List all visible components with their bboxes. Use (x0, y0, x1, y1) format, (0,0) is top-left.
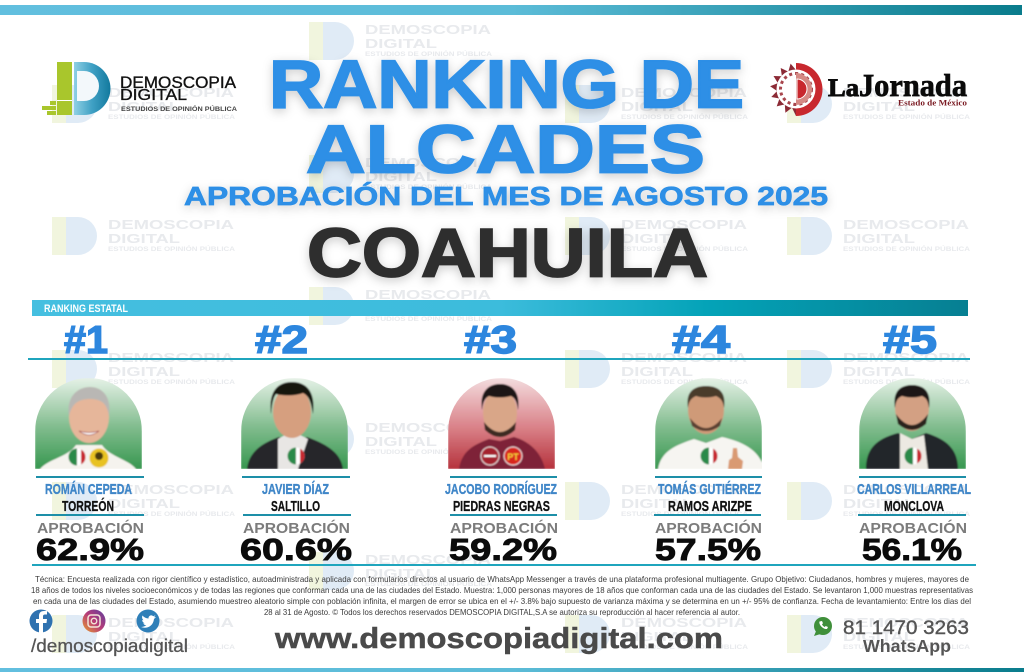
watermark pattern: DIGITAL (621, 231, 693, 246)
city rule (858, 514, 966, 516)
watermark pattern: ESTUDIOS DE OPINIÓN PÚBLICA (843, 510, 971, 518)
watermark pattern: ESTUDIOS DE OPINIÓN PÚBLICA (365, 50, 493, 58)
photo: Jacobo Rodríguez: PT (507, 452, 519, 462)
watermark pattern: DIGITAL (621, 364, 693, 379)
title: Ranking de Alcaldes: ALCADES (306, 112, 705, 188)
watermark pattern: ESTUDIOS DE OPINIÓN PÚBLICA (365, 183, 493, 191)
watermark pattern: DEMOSCOPIA (365, 552, 492, 567)
logo: Demoscopia Digital: DIGITAL (120, 87, 187, 104)
photo: Jacobo Rodríguez (448, 378, 555, 469)
watermark pattern: DIGITAL (621, 629, 693, 644)
approval label: APROBACIÓN (450, 519, 558, 537)
candidate 2 (240, 319, 352, 567)
watermark pattern: DIGITAL (843, 496, 915, 511)
watermark pattern: DEMOSCOPIA (108, 482, 235, 497)
watermark pattern: ESTUDIOS DE OPINIÓN PÚBLICA (108, 510, 236, 518)
watermark pattern: ESTUDIOS DE OPINIÓN PÚBLICA (365, 315, 493, 323)
watermark pattern: DEMOSCOPIA (843, 217, 970, 232)
approval label: APROBACIÓN (859, 519, 967, 537)
logo: La Jornada: Estado de México (898, 98, 967, 108)
watermark pattern: ESTUDIOS DE OPINIÓN PÚBLICA (843, 643, 971, 651)
logo: Demoscopia Digital: DEMOSCOPIA (120, 74, 236, 92)
methodology note: 28 al 31 de Agosto. © Todos los derechos reservados DEMOSCOPIA DIGITAL,S.A se autoriza su reproducción al hacer referencia al autor. (264, 607, 740, 617)
approval label: APROBACIÓN (243, 519, 350, 537)
name: TOMÁS GUTIÉRREZ (658, 481, 761, 498)
city: SALTILLO (271, 498, 320, 515)
rank number 2: #2 (255, 319, 308, 362)
watermark pattern: DEMOSCOPIA (621, 482, 748, 497)
icon: twitter (136, 610, 160, 632)
icon: facebook (30, 610, 52, 633)
website: www.demoscopiadigital.com (274, 623, 723, 655)
watermark pattern: ESTUDIOS DE OPINIÓN PÚBLICA (108, 643, 236, 651)
watermark pattern: DIGITAL (108, 364, 180, 379)
logo: La Jornada: Jornada (859, 67, 967, 103)
watermark pattern: ESTUDIOS DE OPINIÓN PÚBLICA (621, 245, 749, 253)
city: PIEDRAS NEGRAS (453, 498, 550, 515)
name: ROMÁN CEPEDA (45, 481, 132, 498)
watermark pattern: DIGITAL (621, 99, 693, 114)
city: MONCLOVA (884, 498, 944, 515)
rank divider line (28, 358, 970, 360)
watermark pattern: ESTUDIOS DE OPINIÓN PÚBLICA (621, 510, 749, 518)
logo: La Jornada: La (828, 75, 860, 102)
name rule (655, 476, 762, 478)
name rule (36, 476, 144, 478)
watermark pattern: ESTUDIOS DE OPINIÓN PÚBLICA (621, 643, 749, 651)
icon: instagram (82, 610, 106, 632)
top gradient bar (0, 5, 1022, 15)
city: RAMOS ARIZPE (668, 498, 752, 515)
watermark pattern: DEMOSCOPIA (843, 482, 970, 497)
watermark pattern: DEMOSCOPIA (365, 22, 492, 37)
candidate 3 (445, 319, 558, 567)
approval label: APROBACIÓN (37, 519, 144, 537)
watermark pattern: DIGITAL (108, 629, 180, 644)
watermark pattern: DEMOSCOPIA (108, 217, 235, 232)
city rule (450, 514, 557, 516)
watermark pattern: DIGITAL (843, 231, 915, 246)
watermark pattern: DEMOSCOPIA (365, 155, 492, 170)
name rule (450, 476, 557, 478)
watermark pattern: ESTUDIOS DE OPINIÓN PÚBLICA (843, 378, 971, 386)
name rule (242, 476, 350, 478)
approval value: 59.2% (449, 532, 557, 567)
rank number 3: #3 (464, 319, 517, 362)
logo: Demoscopia Digital: ESTUDIOS DE OPINIÓN PÚBLICA (121, 104, 237, 113)
name: JACOBO RODRÍGUEZ (445, 481, 557, 498)
phone number: 81 1470 3263 (843, 617, 969, 639)
watermark pattern: DIGITAL (108, 496, 180, 511)
watermark pattern: ESTUDIOS DE OPINIÓN PÚBLICA (843, 245, 971, 253)
watermark pattern: DEMOSCOPIA (843, 615, 970, 630)
watermark pattern: DIGITAL (365, 566, 437, 581)
photo: Carlos Villarreal (859, 378, 966, 469)
approval value: 56.1% (862, 532, 962, 567)
watermark pattern: DEMOSCOPIA (365, 287, 492, 302)
candidate 4 (654, 319, 764, 567)
ranking bar: RANKING ESTATAL (44, 303, 128, 315)
watermark pattern: DEMOSCOPIA (108, 350, 235, 365)
state heading: COAHUILA (307, 214, 708, 292)
watermark pattern: DIGITAL (365, 434, 437, 449)
title: Ranking de Alcaldes: RANKING DE (269, 46, 744, 122)
approval value: 60.6% (240, 532, 352, 567)
watermark pattern: ESTUDIOS DE OPINIÓN PÚBLICA (108, 245, 236, 253)
whatsapp label: WhatsApp (863, 636, 951, 656)
watermark pattern: DIGITAL (843, 99, 915, 114)
photo: Javier Díaz (241, 378, 348, 469)
methodology note (31, 574, 973, 617)
watermark pattern: ESTUDIOS DE OPINIÓN PÚBLICA (365, 448, 493, 456)
name: JAVIER DÍAZ (262, 481, 329, 498)
watermark pattern: DIGITAL (843, 629, 915, 644)
bottom gradient bar (0, 668, 1024, 672)
ranking bar (32, 300, 968, 316)
social handle: /demoscopiadigital (31, 636, 188, 656)
rank number 4: #4 (672, 319, 730, 362)
logo: La Jornada (770, 63, 967, 116)
watermark pattern: DEMOSCOPIA (843, 85, 970, 100)
name: CARLOS VILLARREAL (857, 481, 971, 498)
city rule (654, 514, 761, 516)
watermark pattern: DIGITAL (108, 231, 180, 246)
watermark pattern: DEMOSCOPIA (843, 350, 970, 365)
rank number 5: #5 (883, 319, 937, 362)
watermark pattern: DIGITAL (843, 364, 915, 379)
candidate 1 (35, 319, 144, 567)
city rule (243, 514, 351, 516)
watermark pattern: DEMOSCOPIA (621, 217, 748, 232)
watermark pattern: ESTUDIOS DE OPINIÓN PÚBLICA (843, 113, 971, 121)
watermark pattern: DEMOSCOPIA (108, 85, 235, 100)
watermark pattern: DIGITAL (365, 36, 437, 51)
rank number 1: #1 (64, 319, 108, 362)
city: TORREÓN (62, 497, 114, 515)
approval value: 57.5% (655, 532, 761, 567)
watermark pattern: ESTUDIOS DE OPINIÓN PÚBLICA (365, 580, 493, 588)
watermark pattern: ESTUDIOS DE OPINIÓN PÚBLICA (108, 378, 236, 386)
photo: Tomás Gutiérrez (655, 378, 764, 469)
watermark pattern: DIGITAL (365, 301, 437, 316)
watermark pattern: ESTUDIOS DE OPINIÓN PÚBLICA (621, 113, 749, 121)
watermark pattern: ESTUDIOS DE OPINIÓN PÚBLICA (108, 113, 236, 121)
watermark pattern: DIGITAL (365, 169, 437, 184)
subtitle: APROBACIÓN DEL MES DE AGOSTO 2025 (184, 181, 828, 211)
approval label: APROBACIÓN (655, 519, 762, 537)
watermark pattern: DIGITAL (108, 99, 180, 114)
candidate 5 (857, 319, 971, 567)
icon: whatsapp (814, 617, 832, 636)
watermark pattern: DEMOSCOPIA (621, 85, 748, 100)
watermark pattern: DEMOSCOPIA (621, 350, 748, 365)
methodology note: Técnica: Encuesta realizada con rigor científico y estadístico, autoadministrada y aplicada con formularios directos al usuario de WhatsApp Messenger a través de una plataforma profesional multiagente. Grupo Objetivo: Ciudadanos, hombres y mujeres, mayores de (35, 574, 969, 584)
watermark pattern: DEMOSCOPIA (108, 615, 235, 630)
bottom divider line (32, 564, 976, 566)
watermark pattern: DEMOSCOPIA (365, 420, 492, 435)
watermark pattern: ESTUDIOS DE OPINIÓN PÚBLICA (621, 378, 749, 386)
watermark pattern: DIGITAL (621, 496, 693, 511)
title: Ranking de Alcaldes (269, 46, 744, 188)
methodology note: en cada una de las ciudades del Estado, asumiendo muestreo aleatorio simple con población infinita, el margen de error se ubica en el +/- 3.8% bajo supuesto de varianza máxima y se determina en un +/- 95% de confianza. Fecha de levantamiento: Entre los dias del (33, 596, 971, 606)
photo: Román Cepeda (35, 378, 142, 469)
city rule (36, 514, 144, 516)
logo: Demoscopia Digital (42, 62, 237, 115)
watermark pattern: DEMOSCOPIA (621, 615, 748, 630)
approval value: 62.9% (36, 532, 144, 567)
name rule (859, 476, 966, 478)
